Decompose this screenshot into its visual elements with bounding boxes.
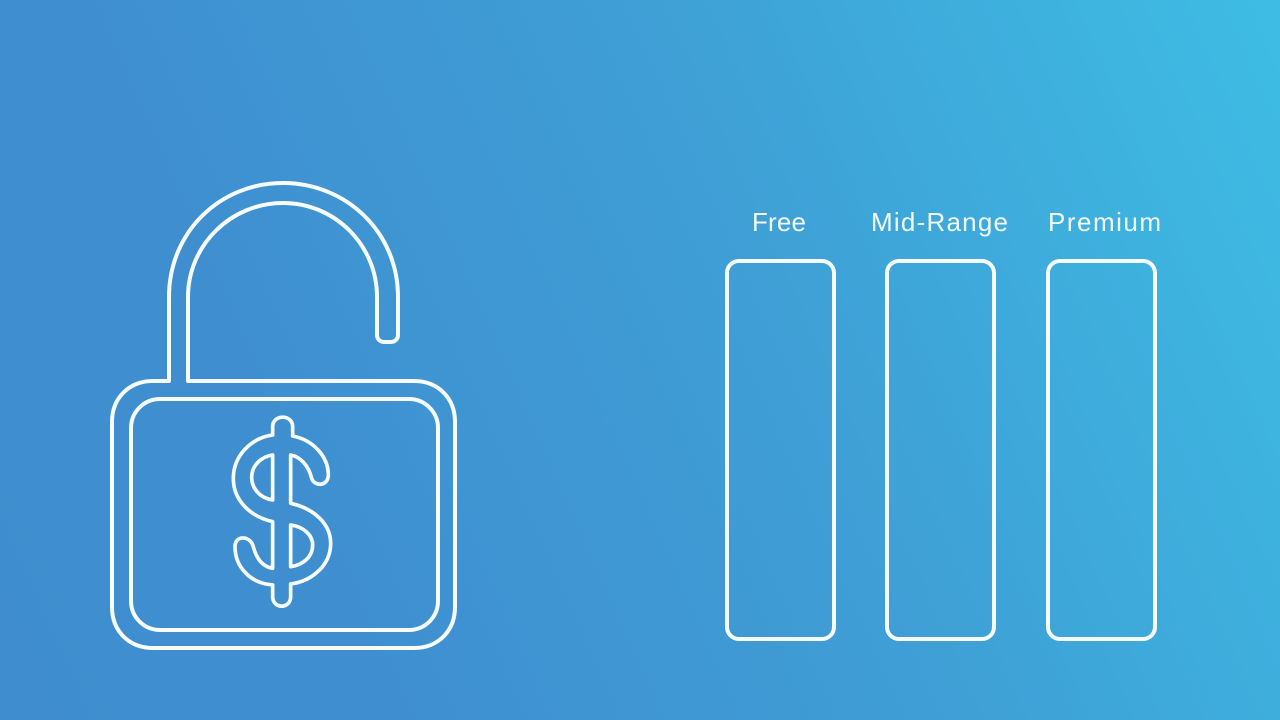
empty bar: Free: [727, 261, 834, 639]
empty bar: Premium: [1048, 261, 1155, 639]
label: Premium: Premium: [1048, 207, 1161, 237]
empty bar: Mid-Range: [887, 261, 994, 639]
padlock body inner outline: [131, 399, 438, 630]
icon: dollar sign: [233, 417, 331, 606]
pricing tier: Mid-Range: [871, 207, 1008, 639]
pricing tier: Free: [727, 207, 834, 639]
label: Mid-Range: Mid-Range: [871, 207, 1008, 237]
pricing tier: Premium: [1048, 207, 1161, 639]
icon: open padlock with dollar sign: [112, 183, 455, 648]
padlock shackle and body outer outline: [112, 183, 455, 648]
label: Free: Free: [752, 207, 806, 237]
